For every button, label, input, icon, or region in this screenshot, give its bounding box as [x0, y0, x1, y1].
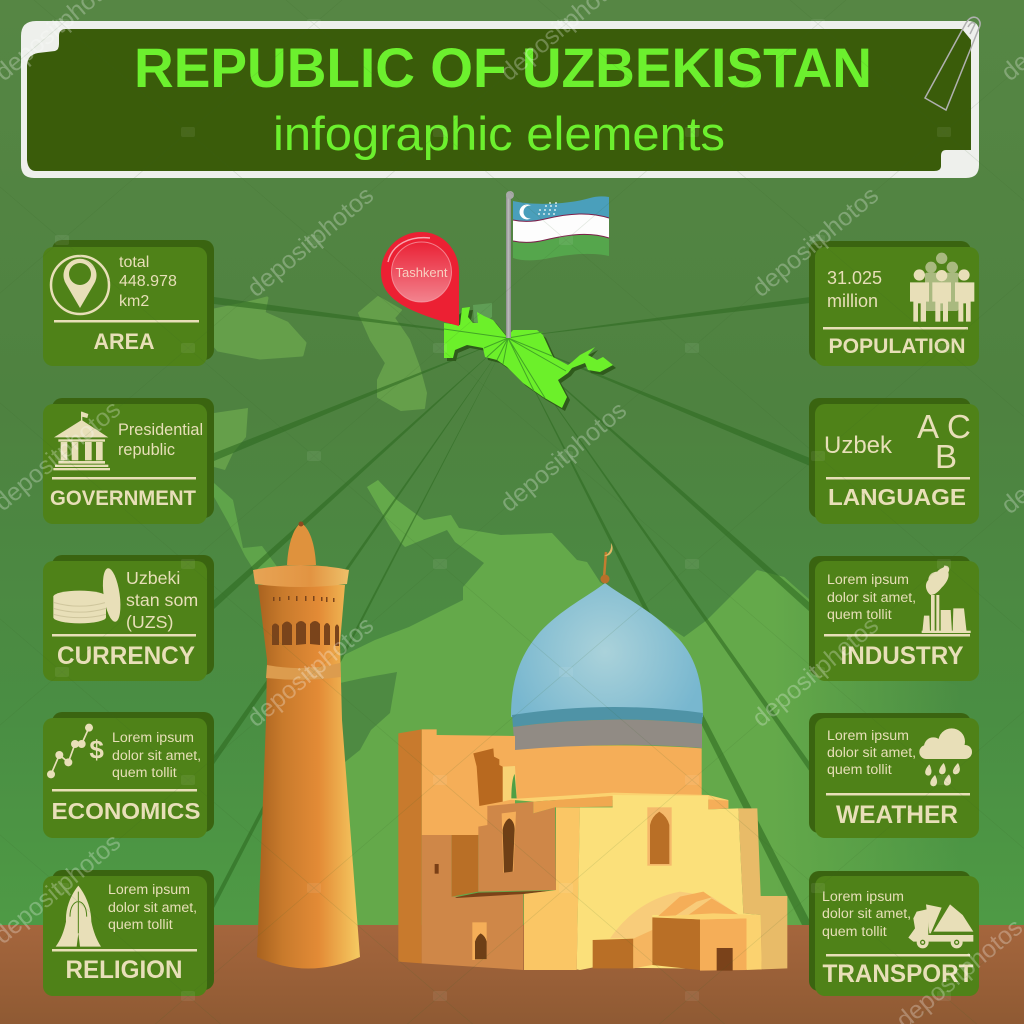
language value: Uzbek — [824, 432, 893, 459]
icon: government building — [53, 412, 110, 470]
mosque dome — [511, 543, 703, 752]
language label: LANGUAGE — [828, 484, 966, 510]
watermarks: depositphotos — [242, 181, 379, 303]
population label: POPULATION — [828, 335, 966, 358]
panel: religion — [43, 870, 214, 996]
icon: letters: A — [917, 408, 939, 445]
religion label: RELIGION — [66, 956, 182, 984]
currency value: Uzbeki — [126, 568, 180, 588]
watermarks: depositphotos — [747, 611, 884, 733]
icon: factory — [922, 566, 971, 633]
icon: rain cloud — [919, 728, 972, 786]
economics text: Lorem ipsum — [112, 730, 194, 746]
minaret tower — [253, 522, 360, 968]
population value: million — [827, 291, 878, 311]
currency value: stan som — [126, 590, 198, 610]
currency label: CURRENCY — [57, 642, 195, 670]
area value: km2 — [119, 293, 149, 310]
economics text: quem tollit — [112, 765, 177, 781]
industry text: quem tollit — [827, 607, 892, 623]
watermarks: depositphotos — [495, 396, 632, 518]
panel: economics — [43, 712, 214, 838]
icon: paper clip — [925, 17, 980, 110]
title: REPUBLIC OF UZBEKISTAN — [134, 36, 872, 99]
map of Uzbekistan — [444, 303, 616, 411]
religion text: Lorem ipsum — [108, 882, 190, 898]
panel: language — [809, 398, 979, 524]
icon: coins — [53, 567, 123, 623]
header banner — [21, 17, 980, 178]
flag on pole — [506, 191, 609, 338]
transport text: quem tollit — [822, 924, 887, 940]
religion text: dolor sit amet, — [108, 900, 197, 916]
icon: praying hands — [56, 886, 101, 947]
government value: Presidential — [118, 421, 203, 439]
icon: people — [910, 253, 974, 322]
panel: area — [43, 240, 214, 366]
world map silhouette — [214, 297, 975, 925]
icon: location pin in circle — [51, 256, 109, 314]
map pin: Tashkent: Tashkent — [395, 265, 448, 280]
weather text: quem tollit — [827, 762, 892, 778]
icon: chart with dollar — [47, 724, 104, 778]
panel: transport — [809, 871, 979, 996]
government label: GOVERNMENT — [50, 487, 196, 510]
icon: dump truck — [908, 904, 973, 948]
ground — [0, 925, 1024, 1024]
government value: republic — [118, 441, 175, 459]
economics text: dolor sit amet, — [112, 748, 201, 764]
panel: currency — [43, 555, 214, 681]
icon: chart with dollar: $ — [89, 734, 104, 764]
panel: government — [43, 398, 214, 524]
panel: industry — [809, 556, 979, 681]
population value: 31.025 — [827, 268, 882, 288]
area value: total — [119, 254, 149, 271]
currency value: (UZS) — [126, 612, 173, 632]
transport text: dolor sit amet, — [822, 906, 911, 922]
radial lines from map to panels — [214, 297, 812, 925]
weather text: Lorem ipsum — [827, 728, 909, 744]
watermarks: depositphotos — [747, 181, 884, 303]
area label: AREA — [94, 329, 155, 354]
transport text: Lorem ipsum — [822, 889, 904, 905]
panel: weather — [809, 713, 979, 838]
industry text: dolor sit amet, — [827, 590, 916, 606]
industry text: Lorem ipsum — [827, 572, 909, 588]
icon: letters: C — [947, 408, 971, 445]
economics label: ECONOMICS — [52, 798, 200, 824]
weather label: WEATHER — [836, 801, 958, 829]
watermarks: depositphotos — [242, 611, 379, 733]
icon: letters: B — [935, 438, 957, 475]
weather text: dolor sit amet, — [827, 745, 916, 761]
map pin: Tashkent — [381, 232, 459, 326]
area value: 448.978 — [119, 273, 177, 290]
industry label: INDUSTRY — [840, 642, 964, 670]
panel: population — [809, 241, 979, 366]
religion text: quem tollit — [108, 917, 173, 933]
subtitle: infographic elements — [273, 107, 725, 160]
mosque building — [398, 729, 787, 971]
transport label: TRANSPORT — [822, 960, 974, 988]
